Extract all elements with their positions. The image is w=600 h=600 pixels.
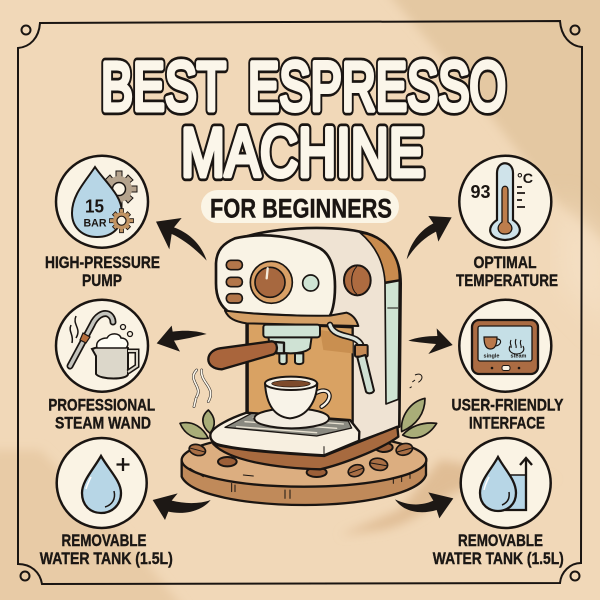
icon: high-pressure pump [56, 156, 148, 248]
title: BEST [101, 48, 226, 125]
right leaves [401, 398, 437, 438]
label: temperature [456, 253, 558, 290]
side knob [344, 265, 371, 295]
tank level [500, 475, 526, 510]
group head [263, 325, 320, 364]
wand [70, 313, 113, 366]
board shadow [340, 460, 560, 535]
drop [480, 457, 516, 511]
arrow: to interface [408, 328, 453, 354]
saucer [254, 408, 329, 428]
wooden base board [182, 433, 426, 505]
title: MACHINE [181, 114, 424, 191]
label: water tank right: WATER TANK (1.5L) [433, 549, 564, 568]
machine body [233, 228, 401, 442]
screen labels: single [484, 354, 499, 360]
cup icon [484, 337, 497, 349]
93 text: 93 [470, 182, 490, 202]
large gear [101, 171, 137, 207]
title: BEST [101, 48, 226, 125]
small steam mark [410, 374, 422, 388]
label: water tank right: REMOVABLE [458, 531, 543, 550]
small gear [110, 209, 134, 233]
icon: water tank plus [57, 438, 147, 528]
label: steam wand: PROFESSIONAL [48, 396, 155, 415]
label: interface: USER-FRIENDLY [452, 396, 564, 415]
label: high-pressure pump: PUMP [82, 271, 122, 290]
title: MACHINE [181, 114, 424, 191]
coffee cup [265, 377, 329, 418]
steam icon [509, 339, 524, 354]
label: high-pressure pump: HIGH-PRESSURE [45, 253, 160, 272]
steam [193, 370, 211, 407]
label: high-pressure pump [45, 253, 160, 290]
steam wand [330, 325, 374, 393]
label: water tank left: REMOVABLE [62, 531, 146, 550]
device [472, 320, 538, 374]
arrows left upper group [156, 218, 207, 352]
screen [478, 326, 532, 361]
icon: steam wand [56, 300, 148, 392]
arrow: to temperature [407, 216, 452, 259]
title [101, 48, 506, 191]
15 bar text: 15 [85, 196, 104, 216]
label: temperature: OPTIMAL [474, 253, 536, 272]
small buttons [226, 260, 242, 303]
icon: water tank arrow [461, 438, 551, 528]
label: interface: INTERFACE [469, 414, 545, 432]
front head [216, 235, 335, 317]
mint indicator [303, 275, 319, 291]
portafilter handle [208, 341, 284, 369]
subtitle pill: FOR BEGINNERS [210, 194, 392, 224]
main dial [250, 261, 292, 303]
label: water tank right [433, 531, 564, 568]
label: water tank left [40, 531, 173, 568]
device buttons [491, 367, 493, 369]
bubbles and steam [120, 324, 126, 330]
arrow: to steam wand [157, 326, 207, 352]
mint side panel [385, 281, 399, 404]
espresso machine illustration [180, 228, 437, 505]
label: steam wand: STEAM WAND [55, 414, 151, 432]
label: water tank left: WATER TANK (1.5L) [40, 549, 173, 568]
icon: user interface: steam [511, 354, 527, 360]
coffee beans [188, 442, 414, 479]
label: interface [452, 396, 564, 432]
tube [490, 163, 520, 240]
arrow: to high-pressure pump [156, 218, 207, 261]
icon: thermometer [459, 156, 551, 248]
arrow: to water tank left [153, 493, 211, 520]
left leaves [180, 410, 214, 439]
pitcher [92, 346, 128, 378]
brown top stripe [360, 233, 399, 282]
arrows right upper group [407, 216, 453, 354]
drip tray base [210, 413, 398, 469]
head lip [225, 311, 358, 326]
orange recess [248, 323, 353, 422]
water drop [72, 167, 122, 237]
arrow: to water tank right [395, 492, 453, 518]
degree C: °C [517, 170, 533, 186]
icon: user interface [459, 300, 551, 392]
feet [218, 443, 393, 477]
recess shadow [320, 330, 353, 353]
label: steam wand [48, 396, 155, 432]
label: temperature: TEMPERATURE [456, 271, 558, 290]
icon: high-pressure pump: BAR [84, 218, 107, 230]
